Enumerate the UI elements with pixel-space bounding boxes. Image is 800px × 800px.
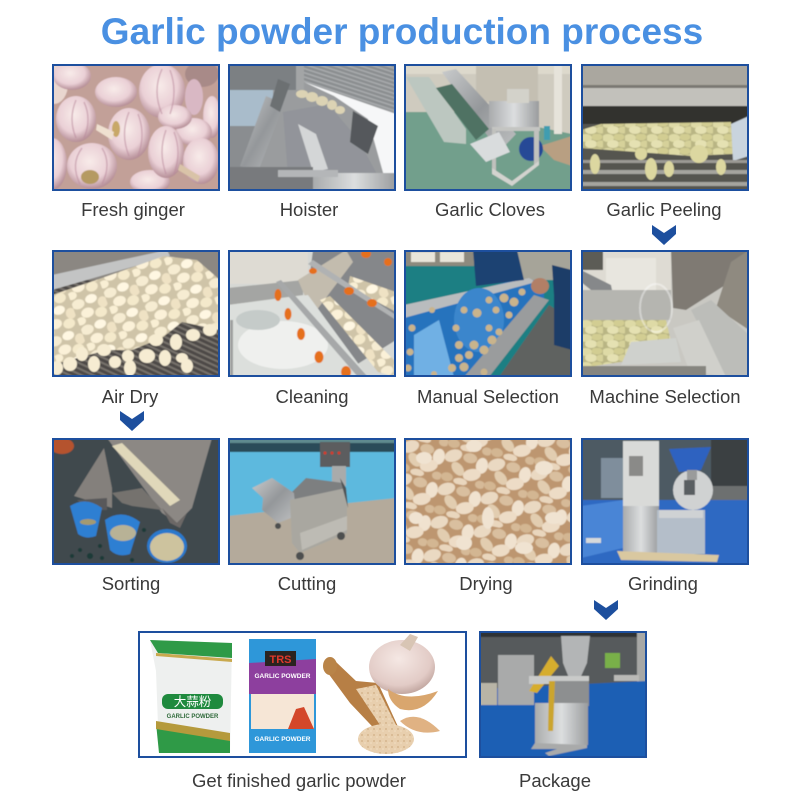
label: Machine Selection: Machine Selection [589, 386, 741, 407]
label: Fresh ginger: Fresh ginger [81, 199, 185, 220]
label: Get finished garlic powder: Get finished garlic powder [192, 770, 406, 791]
product: wooden scoop with powder [323, 657, 414, 754]
label: Manual Selection: Manual Selection [417, 386, 559, 407]
panel: manual selection photo [404, 250, 572, 377]
arrow: air dry to sorting [120, 411, 144, 431]
panel: cleaning photo [228, 250, 396, 378]
label: Cleaning: Cleaning [275, 386, 349, 407]
panel: cutting machine photo [228, 438, 396, 565]
label: Package: Package [519, 770, 591, 791]
product: TRS garlic powder packet: GARLIC POWDER [255, 673, 311, 680]
product: TRS garlic powder packet: TRS [270, 654, 292, 666]
product: green garlic powder bag: 大蒜粉 [174, 694, 212, 709]
product: TRS garlic powder packet [249, 639, 316, 753]
label: Hoister: Hoister [280, 199, 338, 220]
label: Drying: Drying [459, 573, 513, 594]
label: Sorting: Sorting [102, 573, 160, 594]
label: Garlic Peeling: Garlic Peeling [606, 199, 722, 220]
panel: garlic peeling photo [581, 64, 749, 191]
panel: garlic cloves machine photo [404, 64, 572, 191]
product: green garlic powder bag: GARLIC POWDER [167, 714, 219, 720]
panel: hoister photo [228, 64, 396, 191]
label: Grinding: Grinding [628, 573, 698, 594]
product: TRS garlic powder packet: GARLIC POWDER [255, 736, 311, 743]
panel: machine selection photo [581, 250, 749, 377]
panel: air dry photo [51, 250, 220, 377]
label: Cutting: Cutting [278, 573, 336, 594]
panel: sorting photo [50, 438, 220, 565]
label: Air Dry: Air Dry [102, 386, 159, 407]
panel: drying flakes photo [404, 438, 572, 565]
arrow: grinding to package [594, 600, 618, 620]
product: green garlic powder bag [150, 640, 232, 753]
title: Garlic powder production process [101, 11, 703, 52]
label: Garlic Cloves: Garlic Cloves [435, 199, 545, 220]
panel: packaging machine photo [479, 631, 647, 758]
panel: grinding machine photo [581, 438, 749, 565]
panel: fresh garlic photo [52, 64, 220, 191]
panel: finished garlic powder products [139, 632, 466, 757]
product: garlic bulb and cloves [369, 634, 440, 733]
arrow: peeling to machine selection [652, 225, 676, 245]
